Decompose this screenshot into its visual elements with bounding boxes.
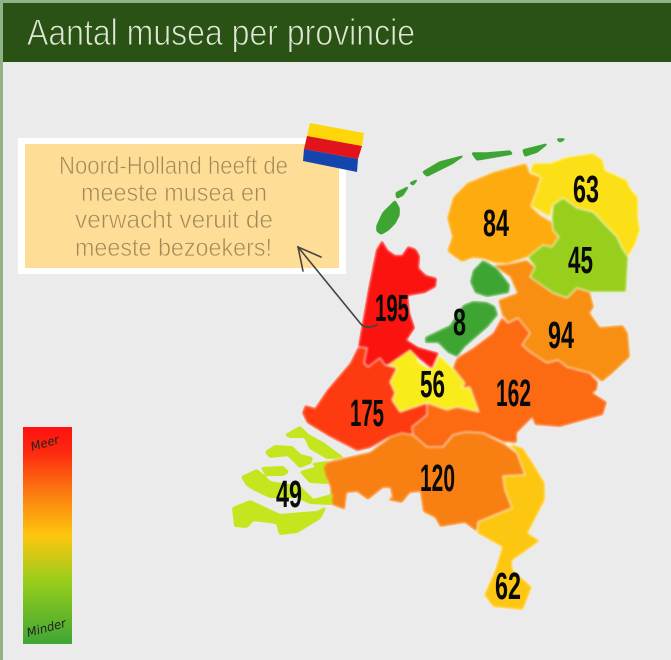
province values: 45: [568, 240, 593, 282]
province values: 8: [453, 302, 466, 344]
province: Utrecht: [388, 350, 479, 412]
province values: [276, 169, 599, 608]
province: Limburg: [477, 443, 545, 610]
province values: 56: [420, 364, 445, 406]
legend: colour scale: [23, 427, 72, 644]
province values: 162: [496, 373, 531, 415]
province: Zuid-Holland: [302, 347, 427, 451]
callout: Noord-Holland heeft de: [59, 152, 288, 180]
province values: 84: [483, 203, 509, 245]
province: Gelderland: [412, 317, 607, 447]
arrow: [298, 247, 377, 327]
callout: verwacht veruit de: [75, 206, 273, 234]
map of the Netherlands: [233, 139, 640, 610]
province: Flevoland: [425, 260, 510, 357]
callout: meeste musea en: [81, 179, 267, 207]
province: Friesland: [447, 163, 559, 264]
title: Aantal musea per provincie: [27, 12, 415, 53]
province: Groningen: [530, 153, 640, 257]
icon: flag of Noord-Holland: [303, 123, 364, 172]
province values: 120: [420, 458, 455, 500]
province values: 63: [573, 169, 599, 211]
province values: 175: [350, 393, 384, 435]
legend: colour scale: Minder: [25, 616, 68, 640]
province: Zeeland: [233, 427, 342, 534]
Wadden islands: [377, 139, 565, 234]
province: Noord-Brabant: [323, 432, 525, 532]
title: [3, 3, 671, 62]
province: Noord-Holland: [358, 240, 439, 369]
province values: 49: [276, 474, 302, 516]
province values: 195: [375, 288, 409, 330]
province values: 62: [495, 566, 521, 608]
callout: meeste bezoekers!: [75, 234, 272, 262]
province values: 94: [548, 315, 574, 357]
province: Overijssel: [493, 260, 630, 382]
province: Drenthe: [528, 198, 628, 298]
legend: colour scale: Meer: [29, 432, 62, 454]
callout: [18, 138, 346, 274]
